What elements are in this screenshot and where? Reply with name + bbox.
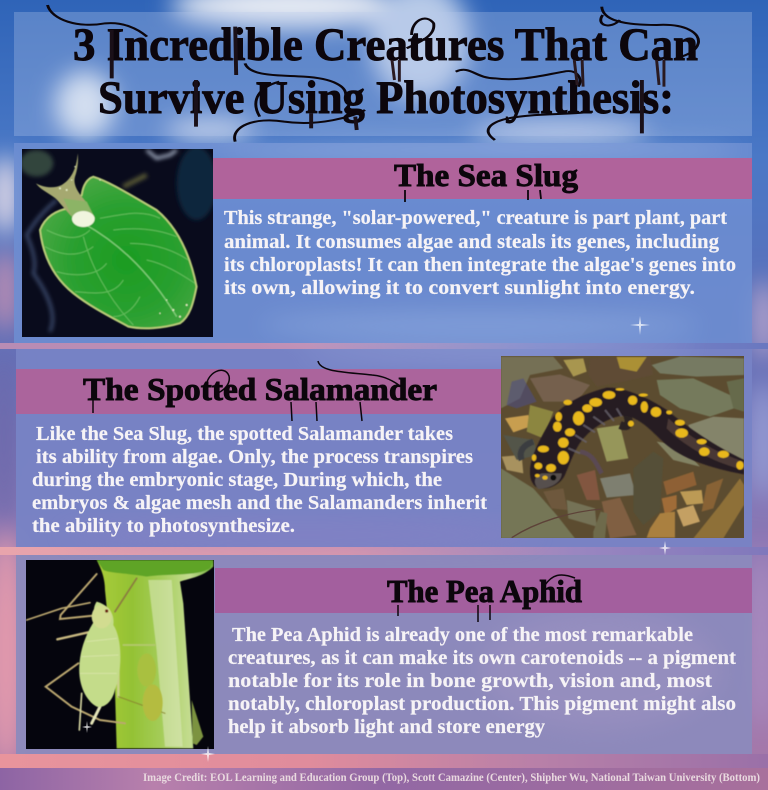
bar: sea slug heading	[213, 158, 752, 199]
text: salamander description: Like the Sea Slug, the spotted Salamander takes	[36, 424, 453, 445]
bar: pea aphid heading	[215, 568, 752, 613]
title: Survive Using Photosynthesis:	[98, 72, 674, 124]
text: sea slug description: This strange, "solar-powered," creature is part plant, part	[224, 208, 728, 229]
text: aphid description	[228, 625, 737, 738]
text: aphid description: creatures, as it can make its own carotenoids -- a pigment	[228, 648, 737, 669]
title swirls and drips	[48, 5, 699, 142]
text: sea slug description: animal. It consumes algae and steals its genes, including	[224, 232, 719, 253]
text: aphid description: The Pea Aphid is already one of the most remarkable	[232, 625, 693, 646]
sparkles	[82, 316, 671, 762]
title	[48, 5, 699, 142]
photo: pea aphid	[26, 560, 214, 749]
photo: sea slug	[20, 147, 217, 337]
text: sea slug description	[224, 208, 736, 299]
bar: spotted salamander heading	[16, 369, 501, 414]
text: sea slug description: its chloroplasts! It can then integrate the algae's genes into	[224, 255, 736, 276]
text: salamander description: the ability to photosynthesize.	[32, 516, 295, 537]
text: salamander description: embryos & algae mesh and the Salamanders inherit	[32, 493, 488, 514]
footer strip	[0, 768, 768, 790]
text: aphid description: notably, chloroplast production. This pigment might also	[228, 694, 736, 715]
text: aphid description: notable for its role in bone growth, vision and, most	[228, 671, 713, 692]
heading: The Sea Slug: The Sea Slug	[394, 157, 578, 193]
soft clouds over panels	[60, 142, 740, 730]
photo: spotted salamander	[501, 356, 744, 538]
panel: spotted salamander	[16, 349, 752, 547]
text: salamander description: its ability from algae. Only, the process transpires	[36, 447, 473, 468]
heading: The Spotted Salamander	[83, 361, 437, 421]
text: salamander description	[32, 424, 488, 537]
heading: The Pea Aphid: The Pea Aphid	[387, 573, 582, 609]
text: aphid description: help it absorb light and store energy	[228, 717, 545, 738]
salamander body	[521, 388, 744, 489]
panel: title	[14, 12, 752, 136]
panel: sea slug	[14, 143, 752, 343]
title: 3 Incredible Creatures That Can	[73, 19, 698, 71]
panel: pea aphid	[16, 555, 752, 754]
heading: The Spotted Salamander: The Spotted Salamander	[83, 371, 437, 407]
text: salamander description: during the embryonic stage, During which, the	[32, 470, 442, 491]
text: sea slug description: its own, allowing it to convert sunlight into energy.	[224, 278, 695, 299]
